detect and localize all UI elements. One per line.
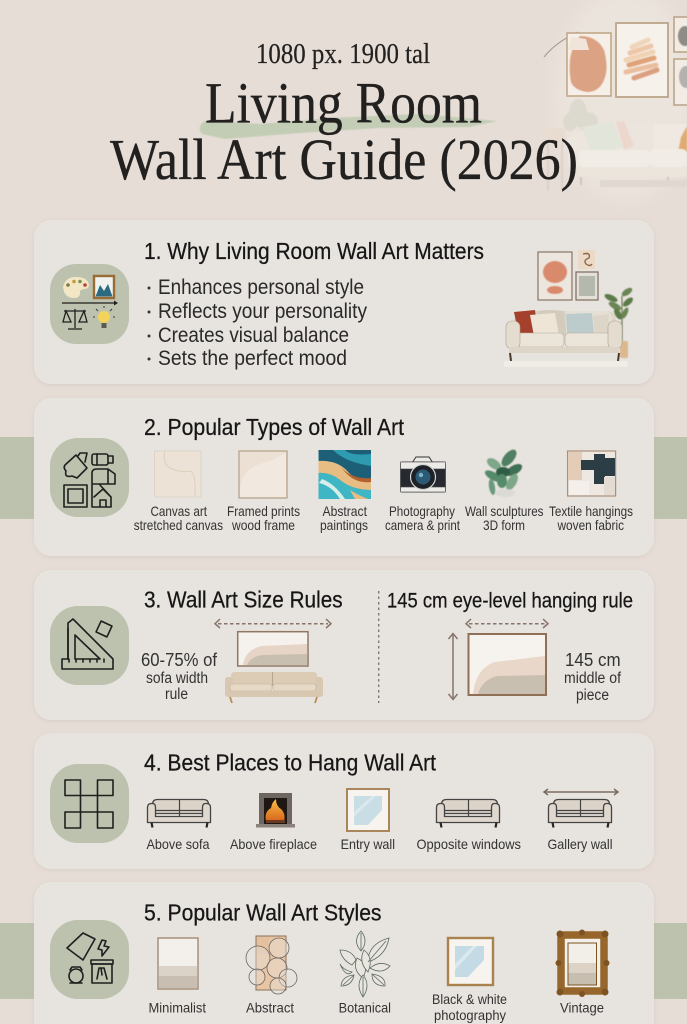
right rule label: middle of [564,670,622,687]
above sofa [146,800,210,852]
bullet list: Enhances personal style [158,276,364,299]
above fireplace: Above fireplace [230,836,317,852]
above fireplace [230,793,317,852]
plant [603,286,635,358]
arrow [62,302,115,304]
right width arrow [466,619,548,628]
abstract painting: Abstract [322,503,367,519]
entry wall [341,789,395,852]
heading: 2. Popular Types of Wall Art [144,414,405,440]
botanical line art: Botanical [339,1000,391,1016]
left rule label [141,650,218,703]
botanical line art [339,931,391,1016]
header sofa [545,121,687,191]
wall sculpture plant: 3D form [483,517,525,533]
camera [385,457,460,533]
textile hanging [549,451,633,533]
abstract painting [318,450,371,533]
panel 1: why wall art matters [34,220,654,384]
panel 2: popular types [34,398,654,556]
bulb [98,311,110,323]
wall sculpture plant [465,447,544,533]
title: Living Room [205,71,482,136]
left rule label: 60-75% of [141,650,218,670]
bullet list [148,276,367,370]
panel 3: size rules [34,570,654,720]
bullet list: Creates visual balance [158,324,349,347]
left rule label: rule [165,686,188,703]
black and white photography: Black & white [432,991,507,1007]
header room illustration [544,0,687,200]
gallery wall [544,789,618,852]
title [110,71,578,192]
width arrow [215,619,331,628]
floor lamp [544,32,578,57]
bullet list: Reflects your personality [158,300,367,323]
right rule label [564,650,622,704]
right heading: 145 cm eye-level hanging rule [387,589,633,613]
abstract line art: Abstract [246,1000,294,1016]
panel 5: styles [34,882,654,1024]
panel 4: where to hang [34,733,654,869]
framed art 3 [674,17,687,52]
canvas art [134,451,223,533]
above sofa: Above sofa [146,836,210,852]
icon tile: set square and ruler [50,606,129,685]
large art [468,634,546,695]
camera: Photography [389,503,455,519]
scales [63,309,87,329]
palette [63,277,89,298]
sofa scene [504,250,635,367]
bullet list: Sets the perfect mood [158,347,347,370]
entry wall: Entry wall [341,836,395,852]
camera: camera & print [385,517,460,533]
textile hanging: Textile hangings [549,503,633,519]
black and white photography [432,938,507,1023]
textile hanging: woven fabric [557,517,624,533]
right rule label: piece [576,687,609,704]
framed prints [227,451,300,533]
icon tile: shapes [50,438,129,517]
left rule label: sofa width [146,670,208,687]
wall sculpture plant: Wall sculptures [465,503,544,519]
framed picture [94,276,114,298]
abstract painting: paintings [320,517,368,533]
canvas art: Canvas art [150,503,207,519]
vintage ornate frame: Vintage [560,1000,604,1016]
black and white photography: photography [434,1007,506,1023]
gallery wall: Gallery wall [548,836,612,852]
subtitle: 1080 px. 1900 tal [256,39,430,70]
minimalist: Minimalist [148,1000,206,1016]
vertical arrow [448,634,458,700]
green brush stroke [200,114,497,139]
canvas art: stretched canvas [134,517,223,533]
icon tile: style objects [50,920,129,999]
abstract line art [246,936,297,1016]
heading: 4. Best Places to Hang Wall Art [144,750,437,776]
framed watercolor 1 [567,33,611,96]
framed prints: Framed prints [227,503,300,519]
title: Wall Art Guide (2026) [110,127,578,192]
framed watercolor 2 [616,23,668,97]
framed art 4 [674,59,687,105]
icon tile: grid [50,764,129,843]
opposite windows: Opposite windows [416,836,521,852]
divider [378,591,380,703]
faded plant [563,99,598,132]
side bands [0,437,687,999]
opposite windows [416,800,521,852]
minimalist [148,938,206,1016]
framed prints: wood frame [231,517,295,533]
art over sofa [238,632,308,666]
heading: 1. Why Living Room Wall Art Matters [144,238,484,264]
vintage ornate frame [556,930,610,1016]
right rule label: 145 cm [565,650,621,670]
beige sofa [225,672,323,703]
icon tile: palette, picture, scales, bulb [50,264,129,344]
heading: 5. Popular Wall Art Styles [144,900,382,926]
heading: 3. Wall Art Size Rules [144,587,343,613]
sofa [514,311,616,336]
